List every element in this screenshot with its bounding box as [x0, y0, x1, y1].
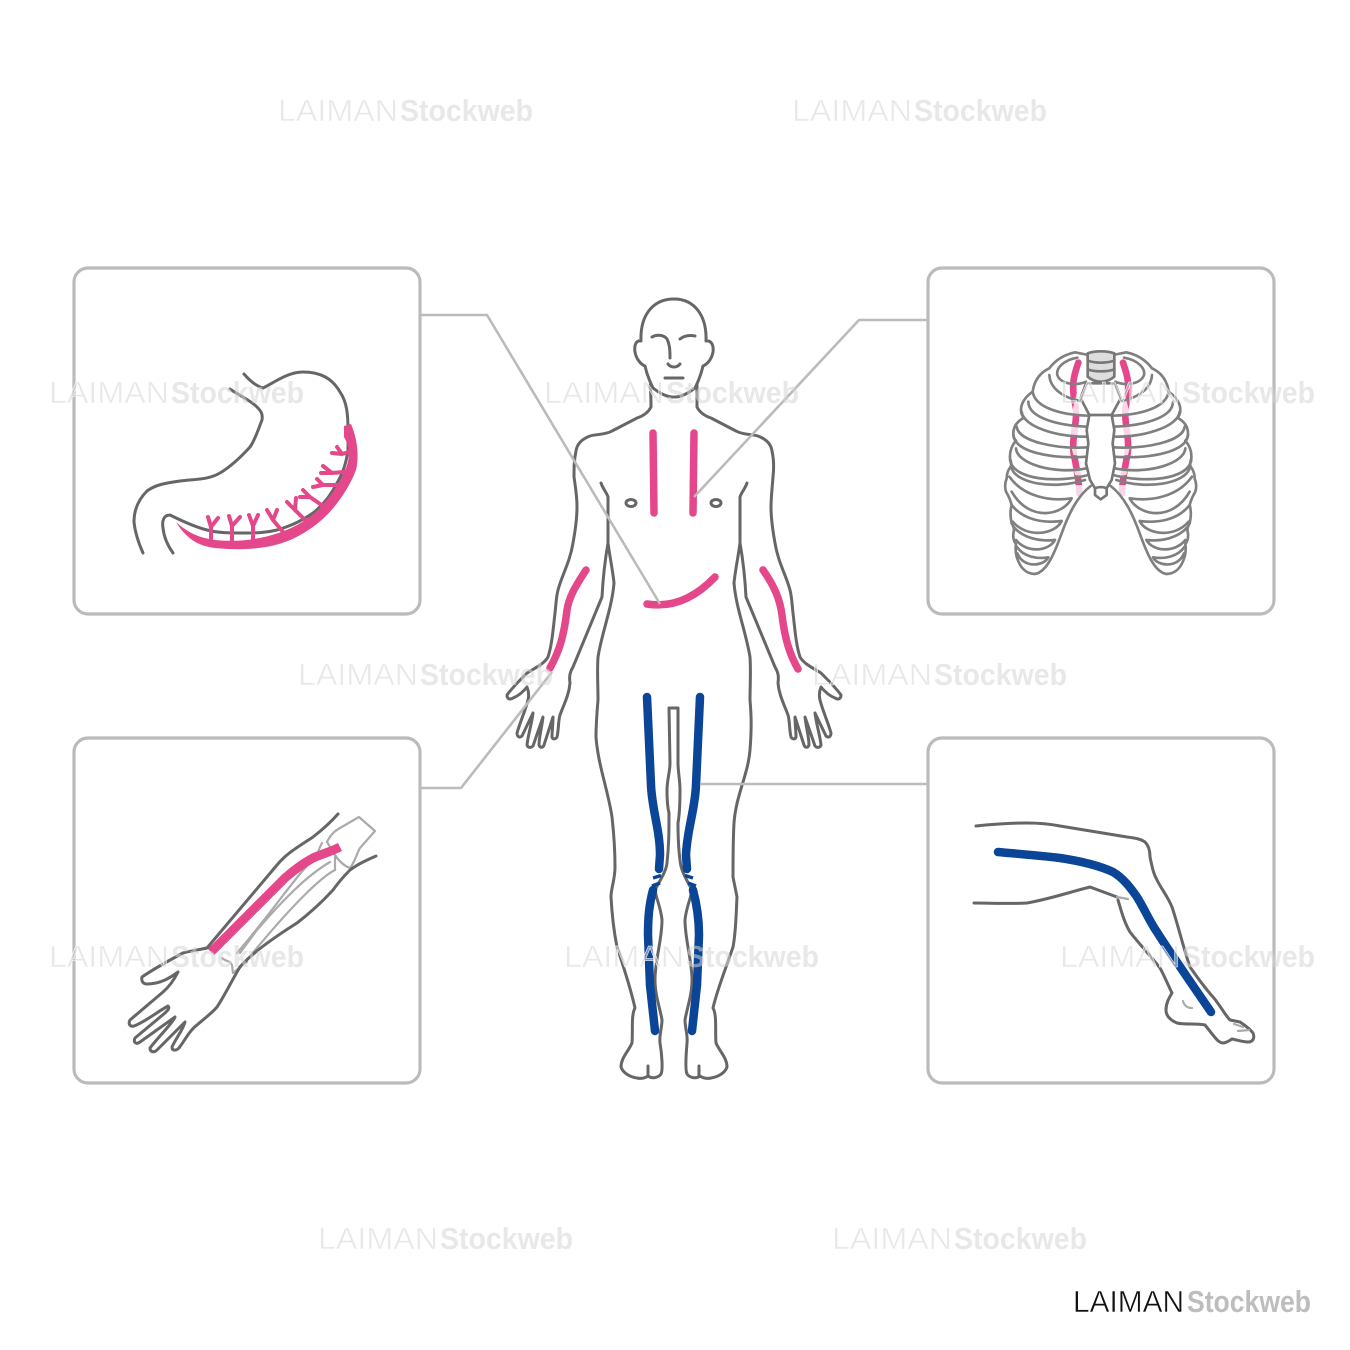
watermark text: LAIMAN [792, 93, 912, 128]
pink artery with branches [176, 424, 358, 549]
watermark text: Stockweb [400, 93, 533, 128]
illustration: stomach with gastroepiploic artery [134, 372, 358, 553]
arm and hand outline [129, 814, 376, 1052]
watermark text: Stockweb [420, 657, 553, 692]
illustration: forearm with radial artery [129, 814, 376, 1052]
logo: LAIMAN Stockweb: LAIMAN [1073, 1284, 1184, 1319]
connector line: leg to thigh [700, 783, 927, 785]
watermark text: LAIMAN [1060, 375, 1180, 410]
sternum [1081, 383, 1121, 499]
watermark text: Stockweb [954, 1221, 1087, 1256]
illustration: bent leg with great saphenous vein [974, 823, 1254, 1043]
panel: stomach [74, 268, 420, 614]
human body figure [507, 299, 841, 1078]
pink vessels on body [550, 433, 798, 669]
connector line: rib cage to chest [694, 320, 927, 497]
watermark text: Stockweb [686, 939, 819, 974]
watermark text: LAIMAN [318, 1221, 438, 1256]
connector line: forearm to wrist [421, 672, 552, 788]
watermark text: Stockweb [1182, 939, 1315, 974]
watermark text: LAIMAN [49, 375, 169, 410]
panel: leg [928, 738, 1274, 1083]
watermark text: LAIMAN [544, 375, 664, 410]
watermark text: LAIMAN [832, 1221, 952, 1256]
blue vein [998, 852, 1211, 1012]
watermark text: LAIMAN [812, 657, 932, 692]
connector line: stomach to abdomen [421, 315, 660, 604]
panel: rib cage [928, 268, 1274, 614]
watermark text: Stockweb [934, 657, 1067, 692]
left ribs [1005, 352, 1091, 574]
watermark text: Stockweb [914, 93, 1047, 128]
trachea [1088, 351, 1114, 382]
panel: forearm [74, 738, 420, 1083]
blue veins on legs [647, 697, 700, 1031]
watermark text: Stockweb [171, 939, 304, 974]
watermark text: LAIMAN [278, 93, 398, 128]
watermark text: Stockweb [171, 375, 304, 410]
watermark text: LAIMAN [298, 657, 418, 692]
leg outline [974, 823, 1254, 1043]
right ribs [1111, 352, 1196, 574]
body outline left half [507, 299, 683, 1078]
translucent rib bands over arteries [1070, 393, 1131, 497]
watermark text: Stockweb [666, 375, 799, 410]
watermark text: LAIMAN [564, 939, 684, 974]
bones [222, 817, 375, 973]
watermark text: Stockweb [440, 1221, 573, 1256]
stomach outline [134, 372, 348, 553]
pink radial artery [211, 847, 340, 952]
light detail marks [1117, 897, 1249, 1031]
pink arteries [1073, 363, 1128, 493]
illustration: rib cage with internal thoracic arteries [1005, 351, 1196, 574]
watermark text: Stockweb [1182, 375, 1315, 410]
watermark text: LAIMAN [49, 939, 169, 974]
watermark text: LAIMAN [1060, 939, 1180, 974]
eyebrow and nose [652, 335, 670, 358]
logo: LAIMAN Stockweb: Stockweb [1187, 1284, 1311, 1319]
body outline right half [674, 299, 841, 1078]
